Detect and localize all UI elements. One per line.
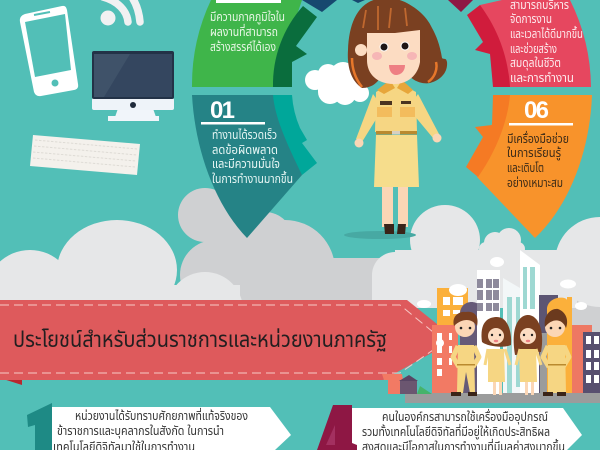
small clouds bbox=[417, 257, 587, 347]
city skyline bbox=[382, 250, 600, 403]
numeral 4 bbox=[317, 405, 357, 450]
shirt bbox=[375, 84, 417, 132]
small white cloud bbox=[305, 62, 369, 105]
text: 01: ลดข้อผิดพลาด bbox=[212, 143, 278, 157]
text: pink: และเวลาได้ดีมากขึ้น bbox=[510, 25, 583, 41]
text: green panel: ผลงานที่สามารถ bbox=[210, 23, 278, 39]
text: 06: ในการเรียนรู้ bbox=[507, 146, 562, 160]
text: green panel: มีความภาคภูมิใจใน bbox=[210, 10, 285, 24]
icon: smartphone bbox=[20, 6, 78, 96]
text: 06: อย่างเหมาะสม bbox=[507, 176, 563, 190]
legs bbox=[382, 186, 393, 227]
text: 01: ทำงานได้รวดเร็ว bbox=[212, 128, 277, 142]
text: pink: สมดุลในชีวิต bbox=[510, 56, 561, 70]
icon: desktop monitor bbox=[92, 51, 174, 121]
neck bbox=[389, 76, 402, 88]
belt bbox=[376, 131, 417, 134]
text: 01: ในการทำงานมากขึ้น bbox=[212, 170, 293, 186]
text: pink: และช่วยสร้าง bbox=[510, 42, 557, 56]
icon: blue top segment bbox=[302, 0, 337, 12]
number 06: 06 bbox=[524, 97, 549, 124]
panel: benefit 06 orange bbox=[466, 95, 592, 238]
ribbon banner bbox=[0, 300, 437, 385]
staff group bbox=[451, 309, 569, 396]
panel: benefit top-left green bbox=[192, 0, 317, 87]
icon: maroon top segment bbox=[448, 0, 473, 12]
text: green panel: สร้างสรรค์ได้เอง bbox=[210, 40, 276, 54]
icon: keyboard bbox=[30, 135, 140, 175]
text: pink: และการทำงาน bbox=[510, 71, 574, 85]
skirt bbox=[374, 135, 419, 187]
face bbox=[367, 30, 420, 84]
mouth bbox=[389, 65, 405, 75]
text: 01: และมีความมั่นใจ bbox=[212, 156, 280, 171]
divider line bbox=[216, 0, 281, 3]
cheeks bbox=[372, 52, 417, 60]
panel: benefit 01 teal bbox=[192, 95, 317, 238]
clouds background bbox=[0, 188, 600, 360]
eyes bbox=[380, 42, 410, 52]
staff woman 2 bbox=[514, 315, 542, 395]
text: 06: และเติบโต bbox=[507, 161, 544, 175]
staff man 1 bbox=[451, 312, 479, 396]
text: item 4: คนในองค์กรสามารถใช้เครื่องมืออุปกรณ์ bbox=[382, 408, 548, 424]
panel: item 1 bbox=[27, 403, 291, 450]
title: ประโยชน์สำหรับส่วนราชการและหน่วยงานภาครัฐ bbox=[13, 327, 387, 352]
hair back bbox=[348, 0, 447, 88]
staff man 2 bbox=[543, 309, 569, 396]
text: item 4: รวมทั้งเทคโนโลยีดิจิทัลที่มีอยู่ให้เกิดประสิทธิผล bbox=[362, 423, 550, 439]
panel: item 4 bbox=[317, 405, 582, 450]
text: item 1: หน่วยงานได้รับทราบศักยภาพที่แท้จริงของ bbox=[75, 407, 248, 423]
teacher character bbox=[344, 0, 447, 239]
icon: navy top segment bbox=[352, 0, 365, 3]
numeral 1 bbox=[27, 403, 52, 450]
panel: benefit pink bbox=[467, 0, 591, 87]
number 01: 01 bbox=[210, 97, 235, 124]
staff woman 1 bbox=[481, 317, 511, 395]
icon: wifi bbox=[100, 0, 140, 26]
text: item 1: ข้าราชการและบุคลากรในสังกัด ในการนำ bbox=[57, 424, 224, 438]
arms bbox=[356, 94, 383, 142]
text: pink: จัดการงาน bbox=[510, 12, 552, 26]
text: 06: มีเครื่องมือช่วย bbox=[507, 130, 569, 146]
